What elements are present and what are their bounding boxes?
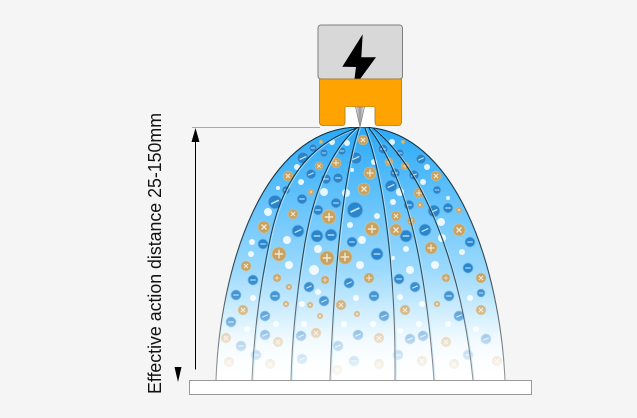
base plate [190, 380, 532, 394]
power supply box [318, 25, 402, 79]
field lines highlight [253, 127, 474, 380]
orange emitter head [320, 79, 402, 126]
distance arrow [174, 128, 200, 382]
label: effective action distance: Effective action distance 25-150mm [145, 113, 165, 394]
emitter notch and needle [346, 107, 374, 127]
reference line at emitter tip [192, 126, 320, 128]
icon: lightning bolt [342, 34, 376, 88]
infographic: electrostatic discharge diagram [148, 24, 532, 395]
charged particles [217, 134, 504, 375]
field lines [216, 127, 505, 380]
dome of ionized air [216, 127, 506, 380]
